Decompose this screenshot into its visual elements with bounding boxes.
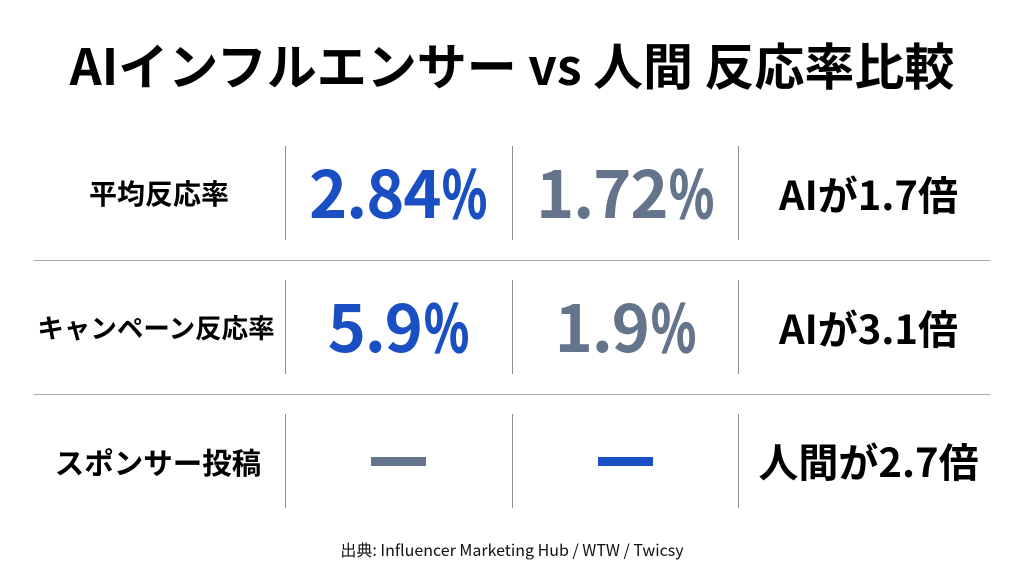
AI value: % xyxy=(442,143,487,237)
human value: 1.9 xyxy=(555,277,649,371)
AI value: % xyxy=(424,277,469,371)
verdict: AIが3.1倍 xyxy=(779,298,958,356)
verdict: 人間が2.7倍 xyxy=(758,431,979,489)
human value: % xyxy=(669,143,714,237)
human value: % xyxy=(651,277,696,371)
row: average engagement rate xyxy=(89,143,958,237)
row label: スポンサー投稿 xyxy=(55,441,261,483)
verdict: AIが1.7倍 xyxy=(779,164,958,222)
human value: 1.72 xyxy=(536,143,667,237)
human dash xyxy=(598,457,653,466)
AI value: 2.84 xyxy=(309,143,440,237)
source footnote: 出典: Influencer Marketing Hub / WTW / Twicsy xyxy=(340,537,684,561)
row: sponsored posts xyxy=(55,431,979,489)
AI dash xyxy=(371,457,426,466)
row: campaign engagement rate xyxy=(37,277,958,371)
human value xyxy=(555,277,696,371)
AI value xyxy=(328,277,469,371)
title: AIインフルエンサー vs 人間 反応率比較 xyxy=(70,28,954,100)
AI value: 5.9 xyxy=(328,277,422,371)
row label: キャンペーン反応率 xyxy=(37,307,275,346)
row label: 平均反応率 xyxy=(89,173,229,213)
